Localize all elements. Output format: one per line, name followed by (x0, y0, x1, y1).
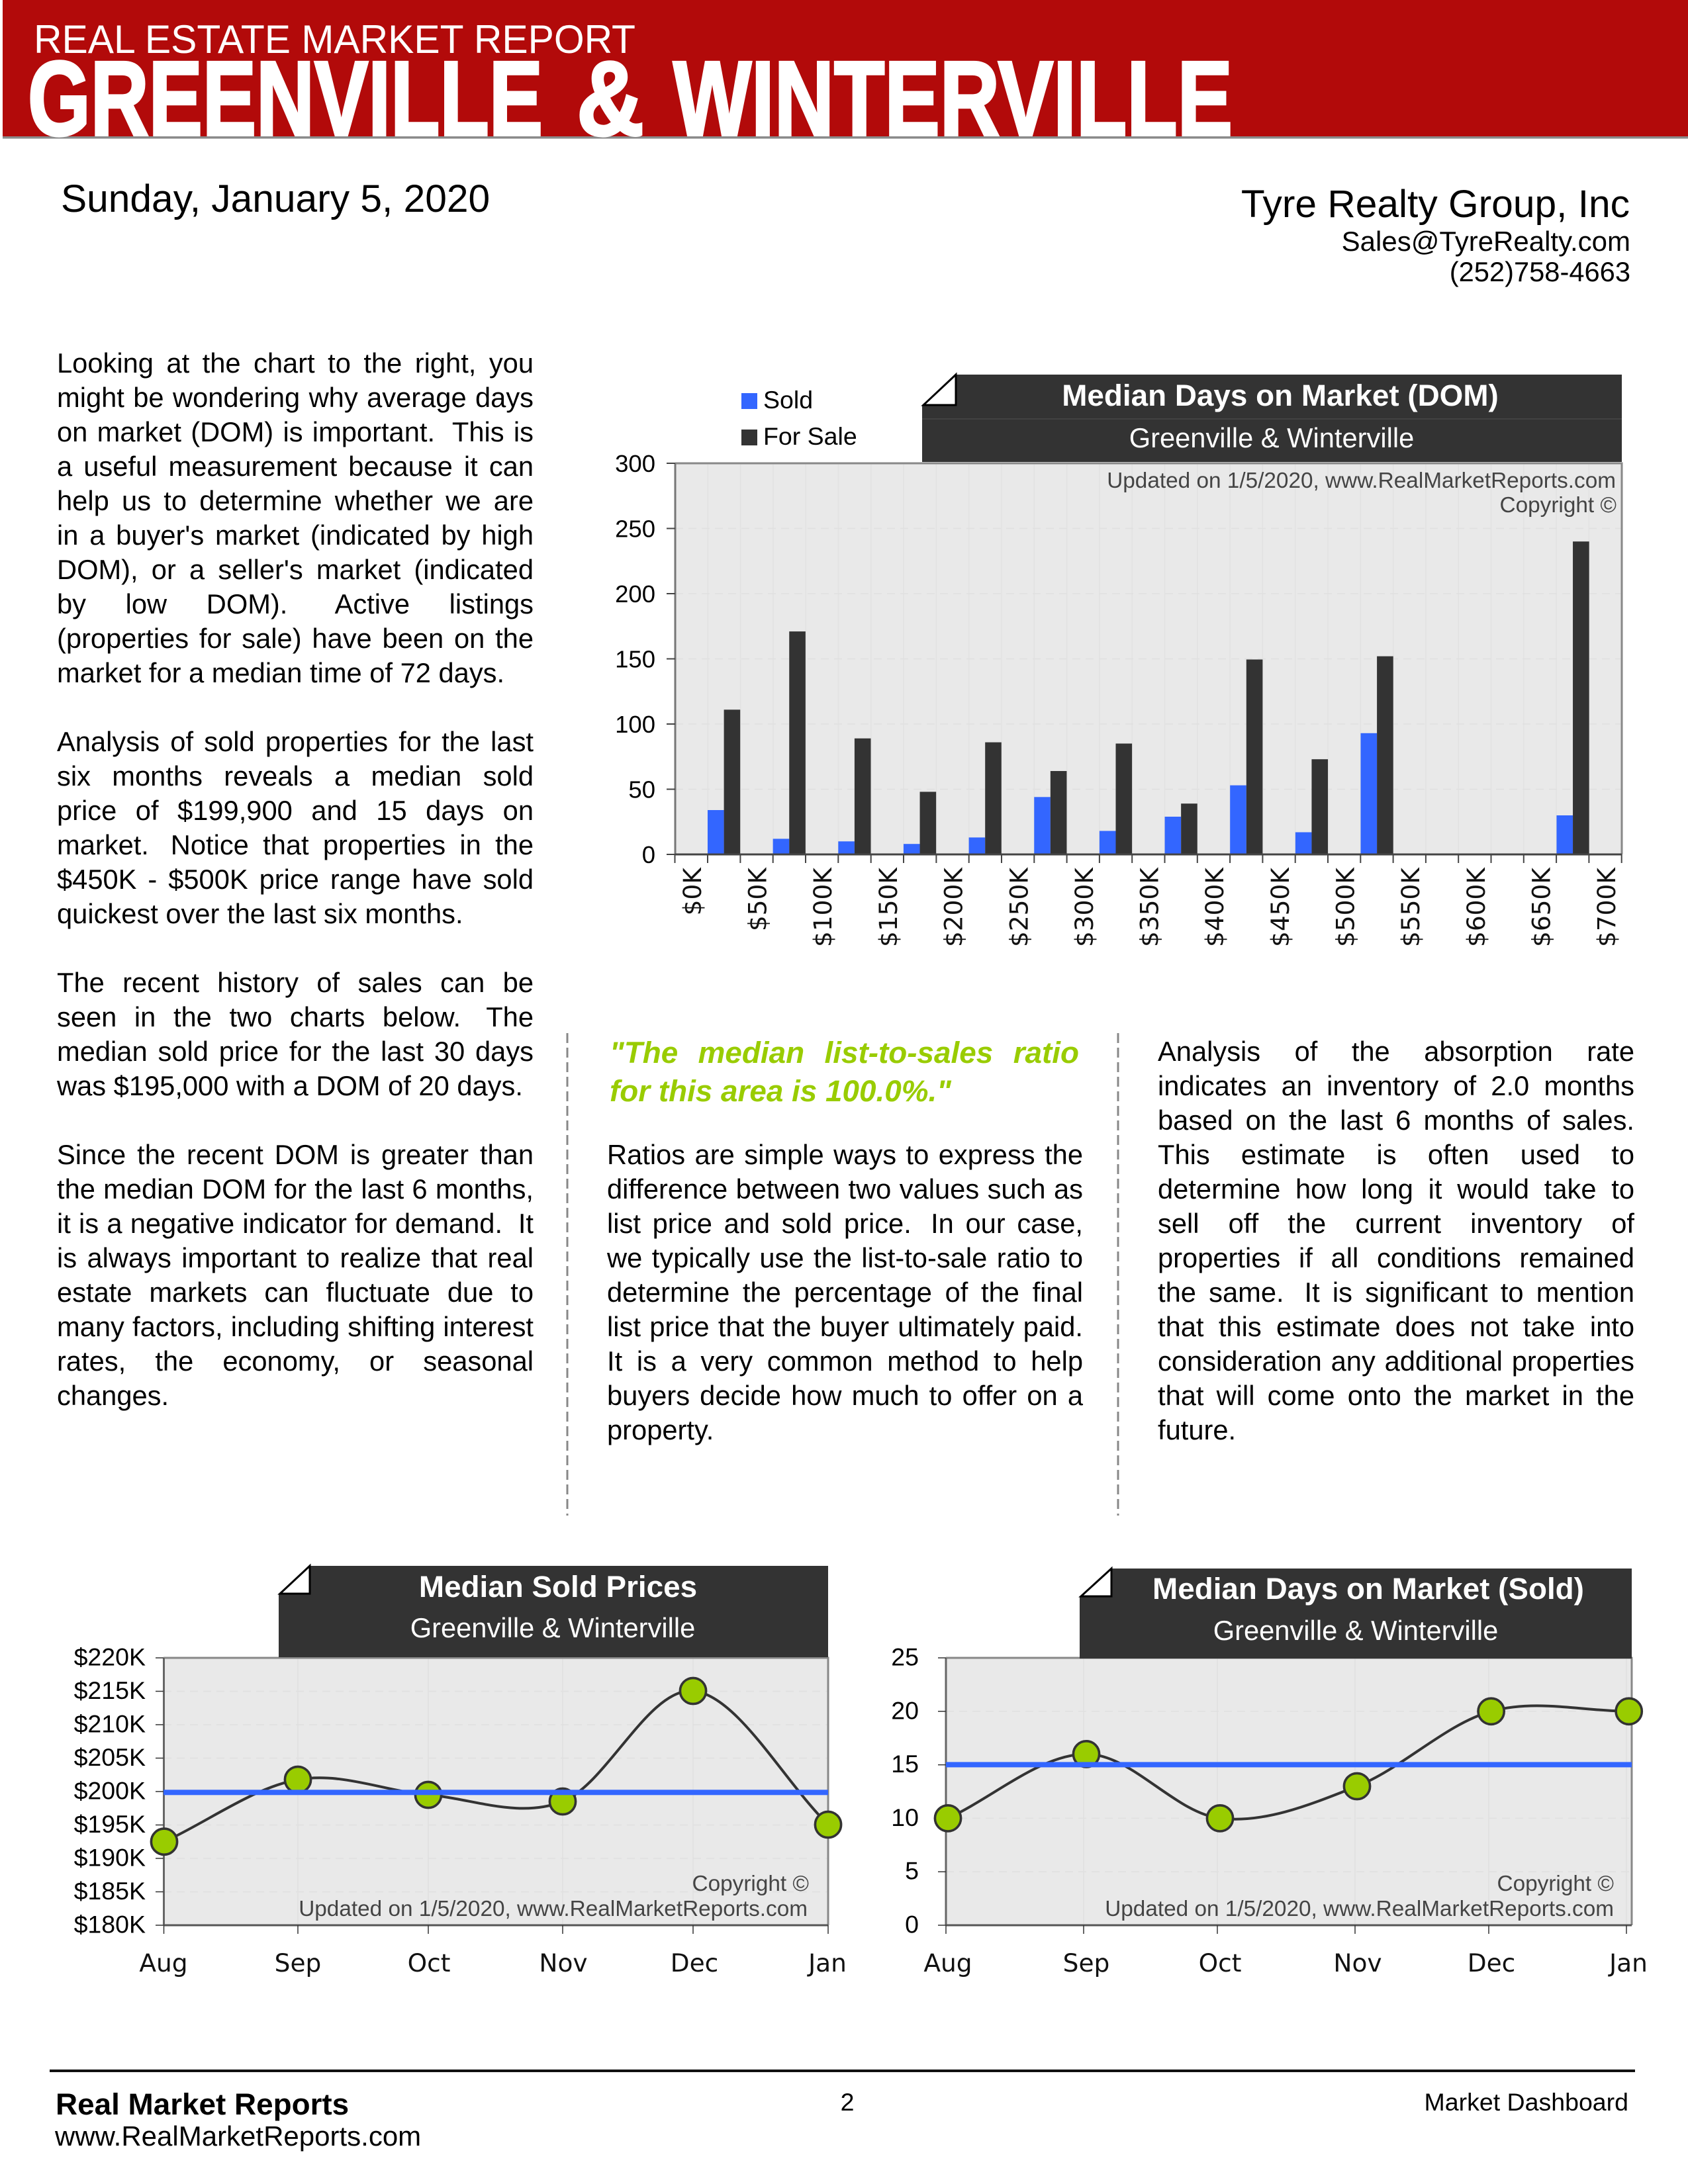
footer (50, 2070, 1635, 2152)
header title: area name: & (577, 39, 644, 158)
chart title tab (1080, 1569, 1632, 1659)
chart title tab: Greenville & Winterville (1213, 1615, 1498, 1646)
x axis labels: $250K (1004, 867, 1033, 947)
text block: left column: it is a negative indicator for demand. It (57, 1208, 534, 1239)
legend: Sold (763, 386, 813, 414)
header banner (3, 0, 1688, 158)
sold price curve (164, 1691, 828, 1842)
chart credit (1107, 469, 1617, 518)
data points (151, 1678, 841, 1854)
x axis labels: Dec (1468, 1948, 1515, 1978)
text block: left column: price of $199,900 and 15 days on (57, 795, 534, 826)
text block: middle column: determine the percentage of the final (607, 1277, 1083, 1308)
y axis labels: $185K (74, 1877, 146, 1905)
x axis labels: $450K (1266, 867, 1295, 947)
text block: left column: changes. (57, 1380, 169, 1411)
x axis labels: Oct (1199, 1948, 1241, 1978)
y axis labels (891, 1643, 919, 1938)
y axis labels (74, 1643, 146, 1938)
y axis labels: 20 (891, 1696, 919, 1724)
text block: right column: sell off the current inventory of (1158, 1208, 1634, 1239)
column dividers (567, 1033, 1118, 1516)
x axis labels: Aug (139, 1948, 188, 1978)
text block: middle column: Ratios are simple ways to express the (607, 1139, 1083, 1170)
text block: left column: six months reveals a median sold (57, 760, 534, 792)
text block: left column: DOM), or a seller's market (indicated (57, 554, 534, 585)
text block: right column: based on the last 6 months of sales. (1158, 1105, 1634, 1136)
text block: right column: This estimate is often used to (1158, 1139, 1634, 1170)
x axis labels: $0K (678, 867, 707, 915)
y axis labels: 50 (628, 776, 655, 803)
footer: Real Market Reports (56, 2087, 349, 2121)
x axis labels: Oct (408, 1948, 450, 1978)
y axis labels: 100 (615, 711, 655, 738)
text block: middle column: difference between two values such as (607, 1173, 1083, 1205)
text block: left column: Since the recent DOM is greater than (57, 1139, 534, 1170)
footer: 2 (841, 2088, 854, 2116)
text block: left column: might be wondering why average days (57, 382, 534, 413)
text block: middle column: buyers decide how much to offer on a (607, 1380, 1083, 1411)
x axis labels: $100K (808, 867, 837, 947)
text block: left column: Looking at the chart to the right, you (57, 347, 534, 379)
x axis labels: $650K (1526, 867, 1556, 947)
x axis labels: $550K (1396, 867, 1425, 947)
text block: middle column: we typically use the list-to-sale ratio to (607, 1242, 1083, 1273)
x axis labels: Sep (1063, 1948, 1109, 1978)
x axis labels: Sep (275, 1948, 321, 1978)
chart credit: Copyright © (692, 1872, 809, 1896)
bars: sold (708, 733, 1573, 854)
y axis labels: $200K (74, 1776, 146, 1804)
x axis labels: $200K (939, 867, 968, 947)
x axis labels: Nov (1333, 1948, 1382, 1978)
text block: left column: was $195,000 with a DOM of 20 days. (57, 1070, 523, 1101)
text block: left column (57, 347, 534, 1411)
report date: Sunday, January 5, 2020 (61, 177, 490, 220)
y axis labels (615, 450, 655, 868)
text block: right column: determine how long it would take to (1158, 1173, 1634, 1205)
callout: list-to-sales ratio quote: "The median list-to-sales ratio (610, 1036, 1079, 1069)
x axis labels: $350K (1135, 867, 1164, 947)
text block: right column (1158, 1036, 1634, 1445)
text block: left column: in a buyer's market (indicated by high (57, 520, 534, 551)
header title: area name (28, 39, 1233, 158)
y axis labels: 250 (615, 515, 655, 543)
text block: left column: the median DOM for the last 6 months, (57, 1173, 534, 1205)
x axis labels: Jan (807, 1948, 847, 1978)
text block: right column: the same. It is significant to mention (1158, 1277, 1634, 1308)
chart: median days on market sold (891, 1569, 1648, 1978)
bars: for sale (724, 541, 1589, 854)
y axis labels: $195K (74, 1810, 146, 1838)
x axis labels (923, 1948, 1648, 1978)
text block: left column: seen in the two charts below. The (57, 1001, 534, 1032)
header title: area name: GREENVILLE (28, 39, 543, 158)
text block: right column: that this estimate does not take into (1158, 1311, 1634, 1342)
text block: left column: $450K - $500K price range have sold (57, 864, 534, 895)
x axis labels: Aug (923, 1948, 972, 1978)
chart credit: Updated on 1/5/2020, www.RealMarketReports.com (1105, 1897, 1614, 1921)
agency contact block: Sales@TyreRealty.com (1342, 226, 1630, 257)
text block: left column: median sold price for the last 30 days (57, 1036, 534, 1067)
plot frame and ticks (675, 463, 1622, 854)
chart: median days on market by price range (615, 375, 1622, 947)
y axis labels: 25 (891, 1643, 919, 1670)
text block: left column: rates, the economy, or seasonal (57, 1345, 534, 1377)
text block: left column: by low DOM). Active listings (57, 588, 534, 619)
x axis labels (678, 867, 1621, 947)
text block: middle column: list price and sold price. In our case, (607, 1208, 1083, 1239)
chart title tab: Greenville & Winterville (1129, 422, 1414, 453)
y axis labels: 300 (615, 450, 655, 477)
x axis labels: $50K (743, 867, 772, 931)
chart credit: Updated on 1/5/2020, www.RealMarketReports.com (299, 1897, 808, 1921)
plot area (946, 1658, 1632, 1925)
chart title tab: Median Days on Market (Sold) (1152, 1572, 1584, 1606)
footer: www.RealMarketReports.com (54, 2120, 421, 2152)
text block: right column: that will come onto the market in the (1158, 1380, 1634, 1411)
chart title tab: Greenville & Winterville (410, 1612, 695, 1643)
data points (935, 1698, 1642, 1831)
plot frame and ticks (164, 1658, 828, 1925)
legend: For Sale (763, 422, 857, 450)
x axis labels: Nov (539, 1948, 588, 1978)
x axis labels (139, 1948, 847, 1978)
agency contact block: Tyre Realty Group, Inc (1241, 183, 1630, 226)
chart credit: Copyright © (1497, 1872, 1614, 1896)
text block: right column: Analysis of the absorption rate (1158, 1036, 1634, 1067)
chart title tab (922, 375, 1622, 462)
text block: left column: Analysis of sold properties for the last (57, 726, 534, 757)
days on market curve (948, 1706, 1629, 1819)
text block: left column: is always important to realize that real (57, 1242, 534, 1273)
y axis labels: 10 (891, 1803, 919, 1831)
y axis labels: 0 (642, 841, 655, 868)
chart credit: Copyright © (1500, 493, 1617, 518)
x axis labels: $600K (1462, 867, 1491, 947)
chart: median sold prices (74, 1566, 847, 1978)
y axis labels: 0 (905, 1910, 919, 1938)
x axis labels: $400K (1200, 867, 1229, 947)
callout: list-to-sales ratio quote: for this area is 100.0%." (610, 1074, 951, 1108)
y axis labels: $180K (74, 1910, 146, 1938)
text block: left column: on market (DOM) is important. This is (57, 416, 534, 447)
y axis labels: $215K (74, 1676, 146, 1704)
text block: right column: future. (1158, 1414, 1236, 1445)
y axis labels: 15 (891, 1750, 919, 1778)
chart credit: Updated on 1/5/2020, www.RealMarketReports.com (1107, 469, 1616, 493)
y axis labels: 150 (615, 646, 655, 672)
text block: middle column: property. (607, 1414, 714, 1445)
plot area (164, 1658, 828, 1925)
x axis labels: $700K (1592, 867, 1621, 947)
text block: middle column: list price that the buyer ultimately paid. (607, 1311, 1083, 1342)
x axis labels: Dec (671, 1948, 718, 1978)
footer: Market Dashboard (1425, 2088, 1628, 2116)
text block: left column: quickest over the last six months. (57, 898, 463, 929)
legend (741, 386, 857, 450)
text block: left column: The recent history of sales can be (57, 967, 534, 998)
chart credit (1105, 1872, 1614, 1921)
x axis labels: $500K (1331, 867, 1360, 947)
chart title tab (279, 1566, 828, 1657)
text block: left column: estate markets can fluctuate due to (57, 1277, 534, 1308)
text block: right column: consideration any additional properties (1158, 1345, 1634, 1377)
text block: middle column: It is a very common method to help (607, 1345, 1083, 1377)
agency contact block (1241, 183, 1630, 287)
chart title tab: Median Sold Prices (419, 1570, 697, 1604)
y axis labels: $210K (74, 1710, 146, 1738)
agency contact block: (252)758-4663 (1450, 256, 1630, 287)
median reference line (946, 1762, 1632, 1767)
text block: left column: many factors, including shifting interest (57, 1311, 534, 1342)
y axis labels: $220K (74, 1643, 146, 1670)
text block: right column: indicates an inventory of 2.0 months (1158, 1070, 1634, 1101)
x axis labels: $150K (874, 867, 903, 947)
chart title tab: Median Days on Market (DOM) (1062, 379, 1499, 412)
x axis labels: $300K (1070, 867, 1099, 947)
text block: middle column (607, 1139, 1083, 1445)
chart credit (299, 1872, 809, 1921)
y axis labels: 200 (615, 580, 655, 608)
callout: list-to-sales ratio quote (610, 1036, 1079, 1108)
header title: area name: WINTERVILLE (673, 39, 1233, 158)
text block: left column: a useful measurement because it can (57, 451, 534, 482)
text block: left column: market for a median time of 72 days. (57, 657, 504, 688)
plot frame and ticks (946, 1658, 1632, 1925)
text block: left column: market. Notice that properties in the (57, 829, 534, 860)
median reference line (164, 1790, 828, 1795)
y axis labels: $205K (74, 1743, 146, 1771)
y axis labels: $190K (74, 1844, 146, 1872)
text block: left column: help us to determine whether we are (57, 485, 534, 516)
x axis labels: Jan (1608, 1948, 1648, 1978)
text block: right column: properties if all conditions remained (1158, 1242, 1634, 1273)
text block: left column: (properties for sale) have been on the (57, 623, 534, 654)
header kicker: report label: REAL ESTATE MARKET REPORT (34, 17, 635, 62)
y axis labels: 5 (905, 1857, 919, 1885)
plot area (675, 463, 1622, 854)
